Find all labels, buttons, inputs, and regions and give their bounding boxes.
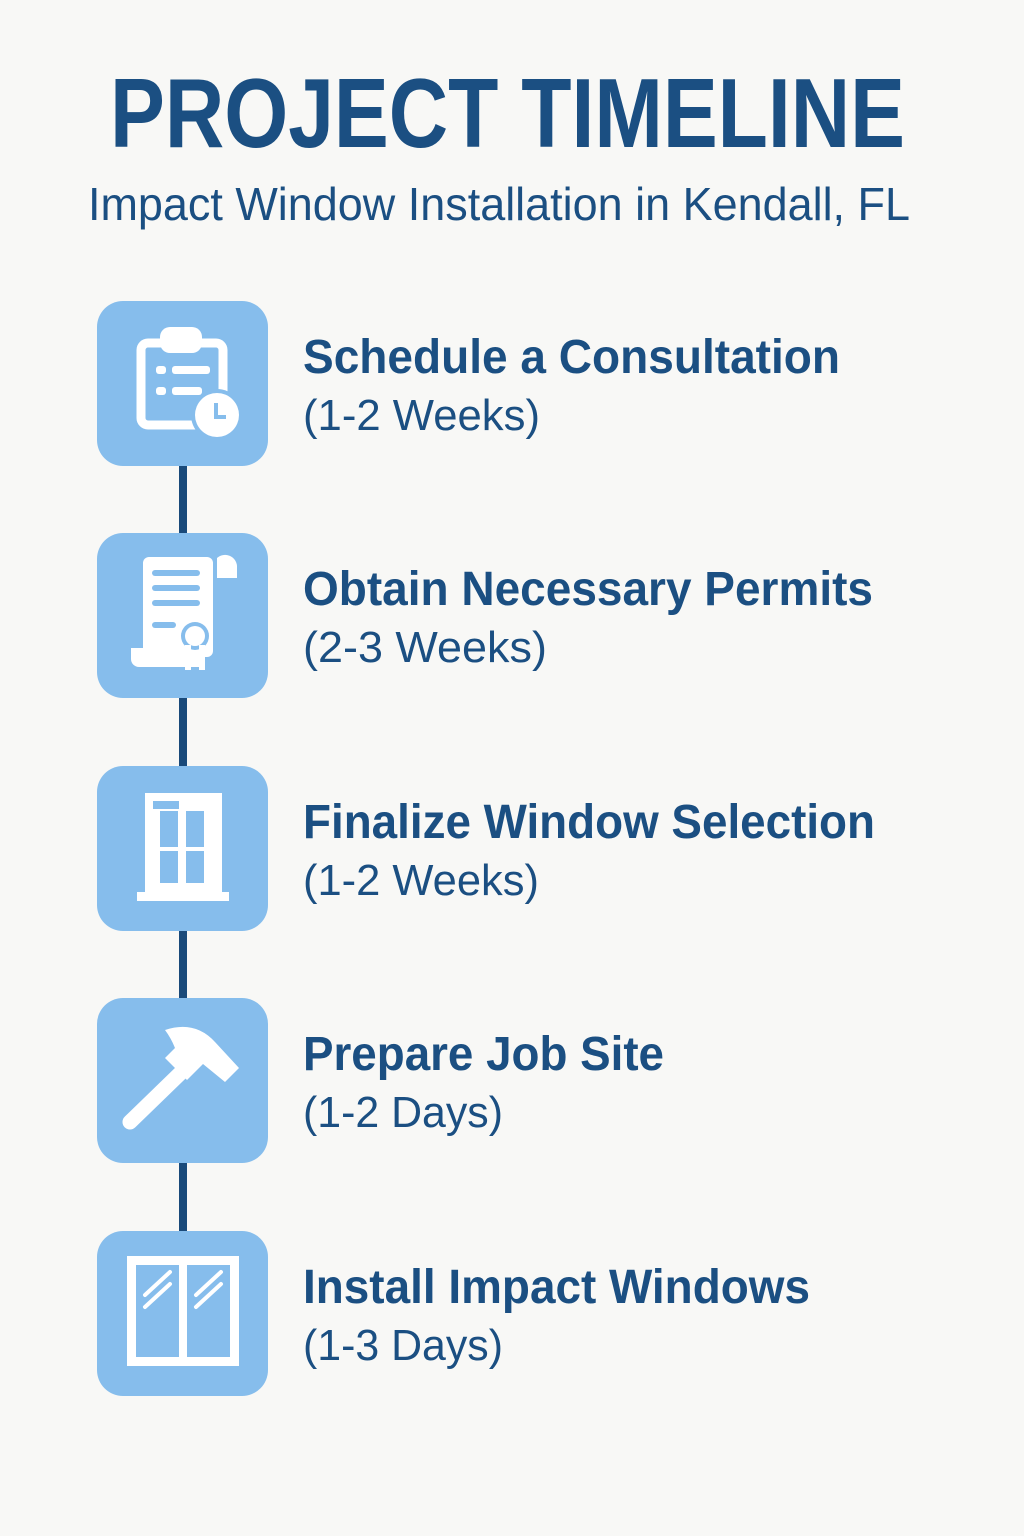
icon: hammer xyxy=(97,998,268,1163)
duration: (1-3 Days) xyxy=(303,1321,503,1370)
icon: window xyxy=(97,766,268,931)
timeline connector xyxy=(179,460,187,1237)
subtitle: Impact Window Installation in Kendall, FL xyxy=(88,178,910,230)
icon: impact window xyxy=(97,1231,268,1396)
heading: Obtain Necessary Permits xyxy=(303,563,873,616)
icon: clipboard with clock xyxy=(97,301,268,466)
heading: Install Impact Windows xyxy=(303,1261,810,1314)
duration: (1-2 Days) xyxy=(303,1088,503,1137)
step 5 xyxy=(97,1231,810,1396)
heading: Finalize Window Selection xyxy=(303,796,875,849)
duration: (1-2 Weeks) xyxy=(303,391,540,440)
heading: Schedule a Consultation xyxy=(303,331,840,384)
step 4 xyxy=(97,998,664,1163)
step 2 xyxy=(97,533,873,698)
step 1 xyxy=(97,301,840,466)
icon: permit scroll xyxy=(97,533,268,698)
duration: (1-2 Weeks) xyxy=(303,856,539,905)
heading: Prepare Job Site xyxy=(303,1028,664,1081)
duration: (2-3 Weeks) xyxy=(303,623,547,672)
step 3 xyxy=(97,766,875,931)
